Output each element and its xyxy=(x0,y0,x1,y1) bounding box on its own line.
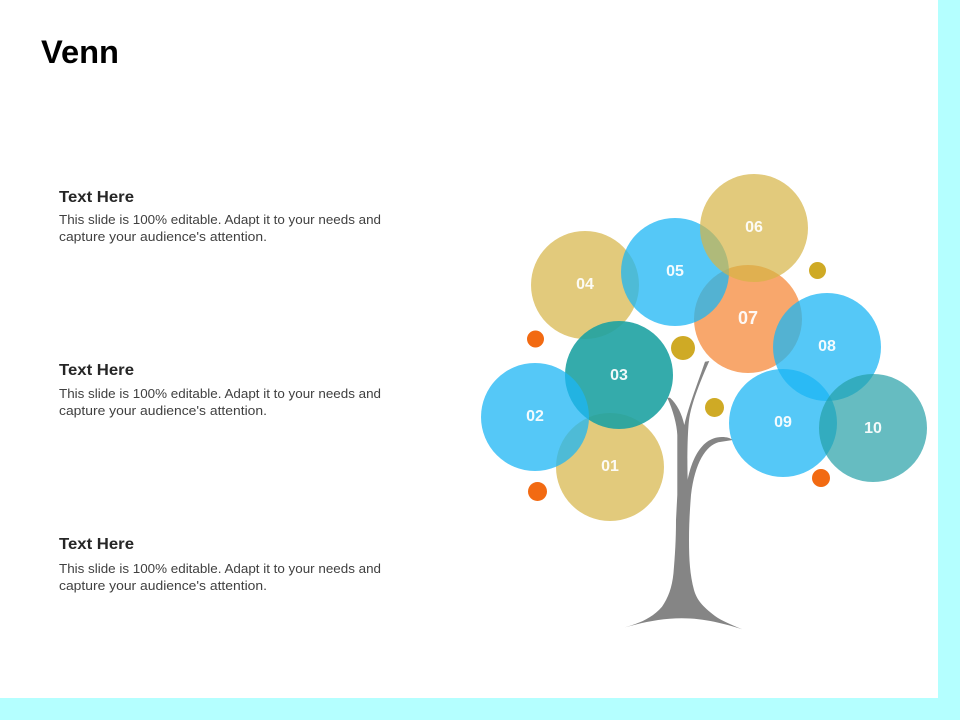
text block 3 xyxy=(59,536,381,593)
circle 06 xyxy=(700,174,808,282)
circle 06: 06 xyxy=(745,219,763,236)
circle 04 xyxy=(531,231,639,339)
orange dot xyxy=(528,482,547,501)
text block 1 body: capture your audience's attention. xyxy=(59,229,267,244)
bottom border band xyxy=(0,698,960,720)
circle 05: 05 xyxy=(666,263,684,280)
orange dot xyxy=(812,469,830,487)
circle 09 xyxy=(729,369,837,477)
text block 1 heading: Text Here xyxy=(59,189,134,206)
circle 08 xyxy=(773,293,881,401)
title: Venn xyxy=(41,34,119,70)
text block 2 body xyxy=(59,386,381,418)
right border band xyxy=(938,0,960,720)
text block 3 heading: Text Here xyxy=(59,536,134,553)
circle 10: 10 xyxy=(864,420,882,437)
circle 02 xyxy=(481,363,589,471)
text block 1 xyxy=(59,189,381,244)
text block 2 body: This slide is 100% editable. Adapt it to your needs and xyxy=(59,386,381,401)
gold dot xyxy=(705,398,724,417)
circle 03 xyxy=(565,321,673,429)
text block 1 body xyxy=(59,212,381,244)
circle 08: 08 xyxy=(818,338,836,355)
circle 01: 01 xyxy=(601,458,619,475)
text block 2 heading: Text Here xyxy=(59,362,134,379)
circle 07 xyxy=(694,265,802,373)
circle 02: 02 xyxy=(526,408,544,425)
circle 04: 04 xyxy=(576,276,594,293)
text block 3 body xyxy=(59,561,381,593)
circle 01 xyxy=(556,413,664,521)
text block 3 body: capture your audience's attention. xyxy=(59,578,267,593)
text block 1 body: This slide is 100% editable. Adapt it to your needs and xyxy=(59,212,381,227)
circle 07: 07 xyxy=(738,308,758,328)
circle 10 xyxy=(819,374,927,482)
circle 09: 09 xyxy=(774,414,792,431)
gold dot xyxy=(809,262,826,279)
gold dot xyxy=(671,336,695,360)
circle 03: 03 xyxy=(610,367,628,384)
text block 3 body: This slide is 100% editable. Adapt it to your needs and xyxy=(59,561,381,576)
orange dot xyxy=(527,330,544,348)
text block 2 body: capture your audience's attention. xyxy=(59,403,267,418)
text block 2 xyxy=(59,362,381,418)
tree trunk and branches xyxy=(625,361,742,629)
circle 05 xyxy=(621,218,729,326)
